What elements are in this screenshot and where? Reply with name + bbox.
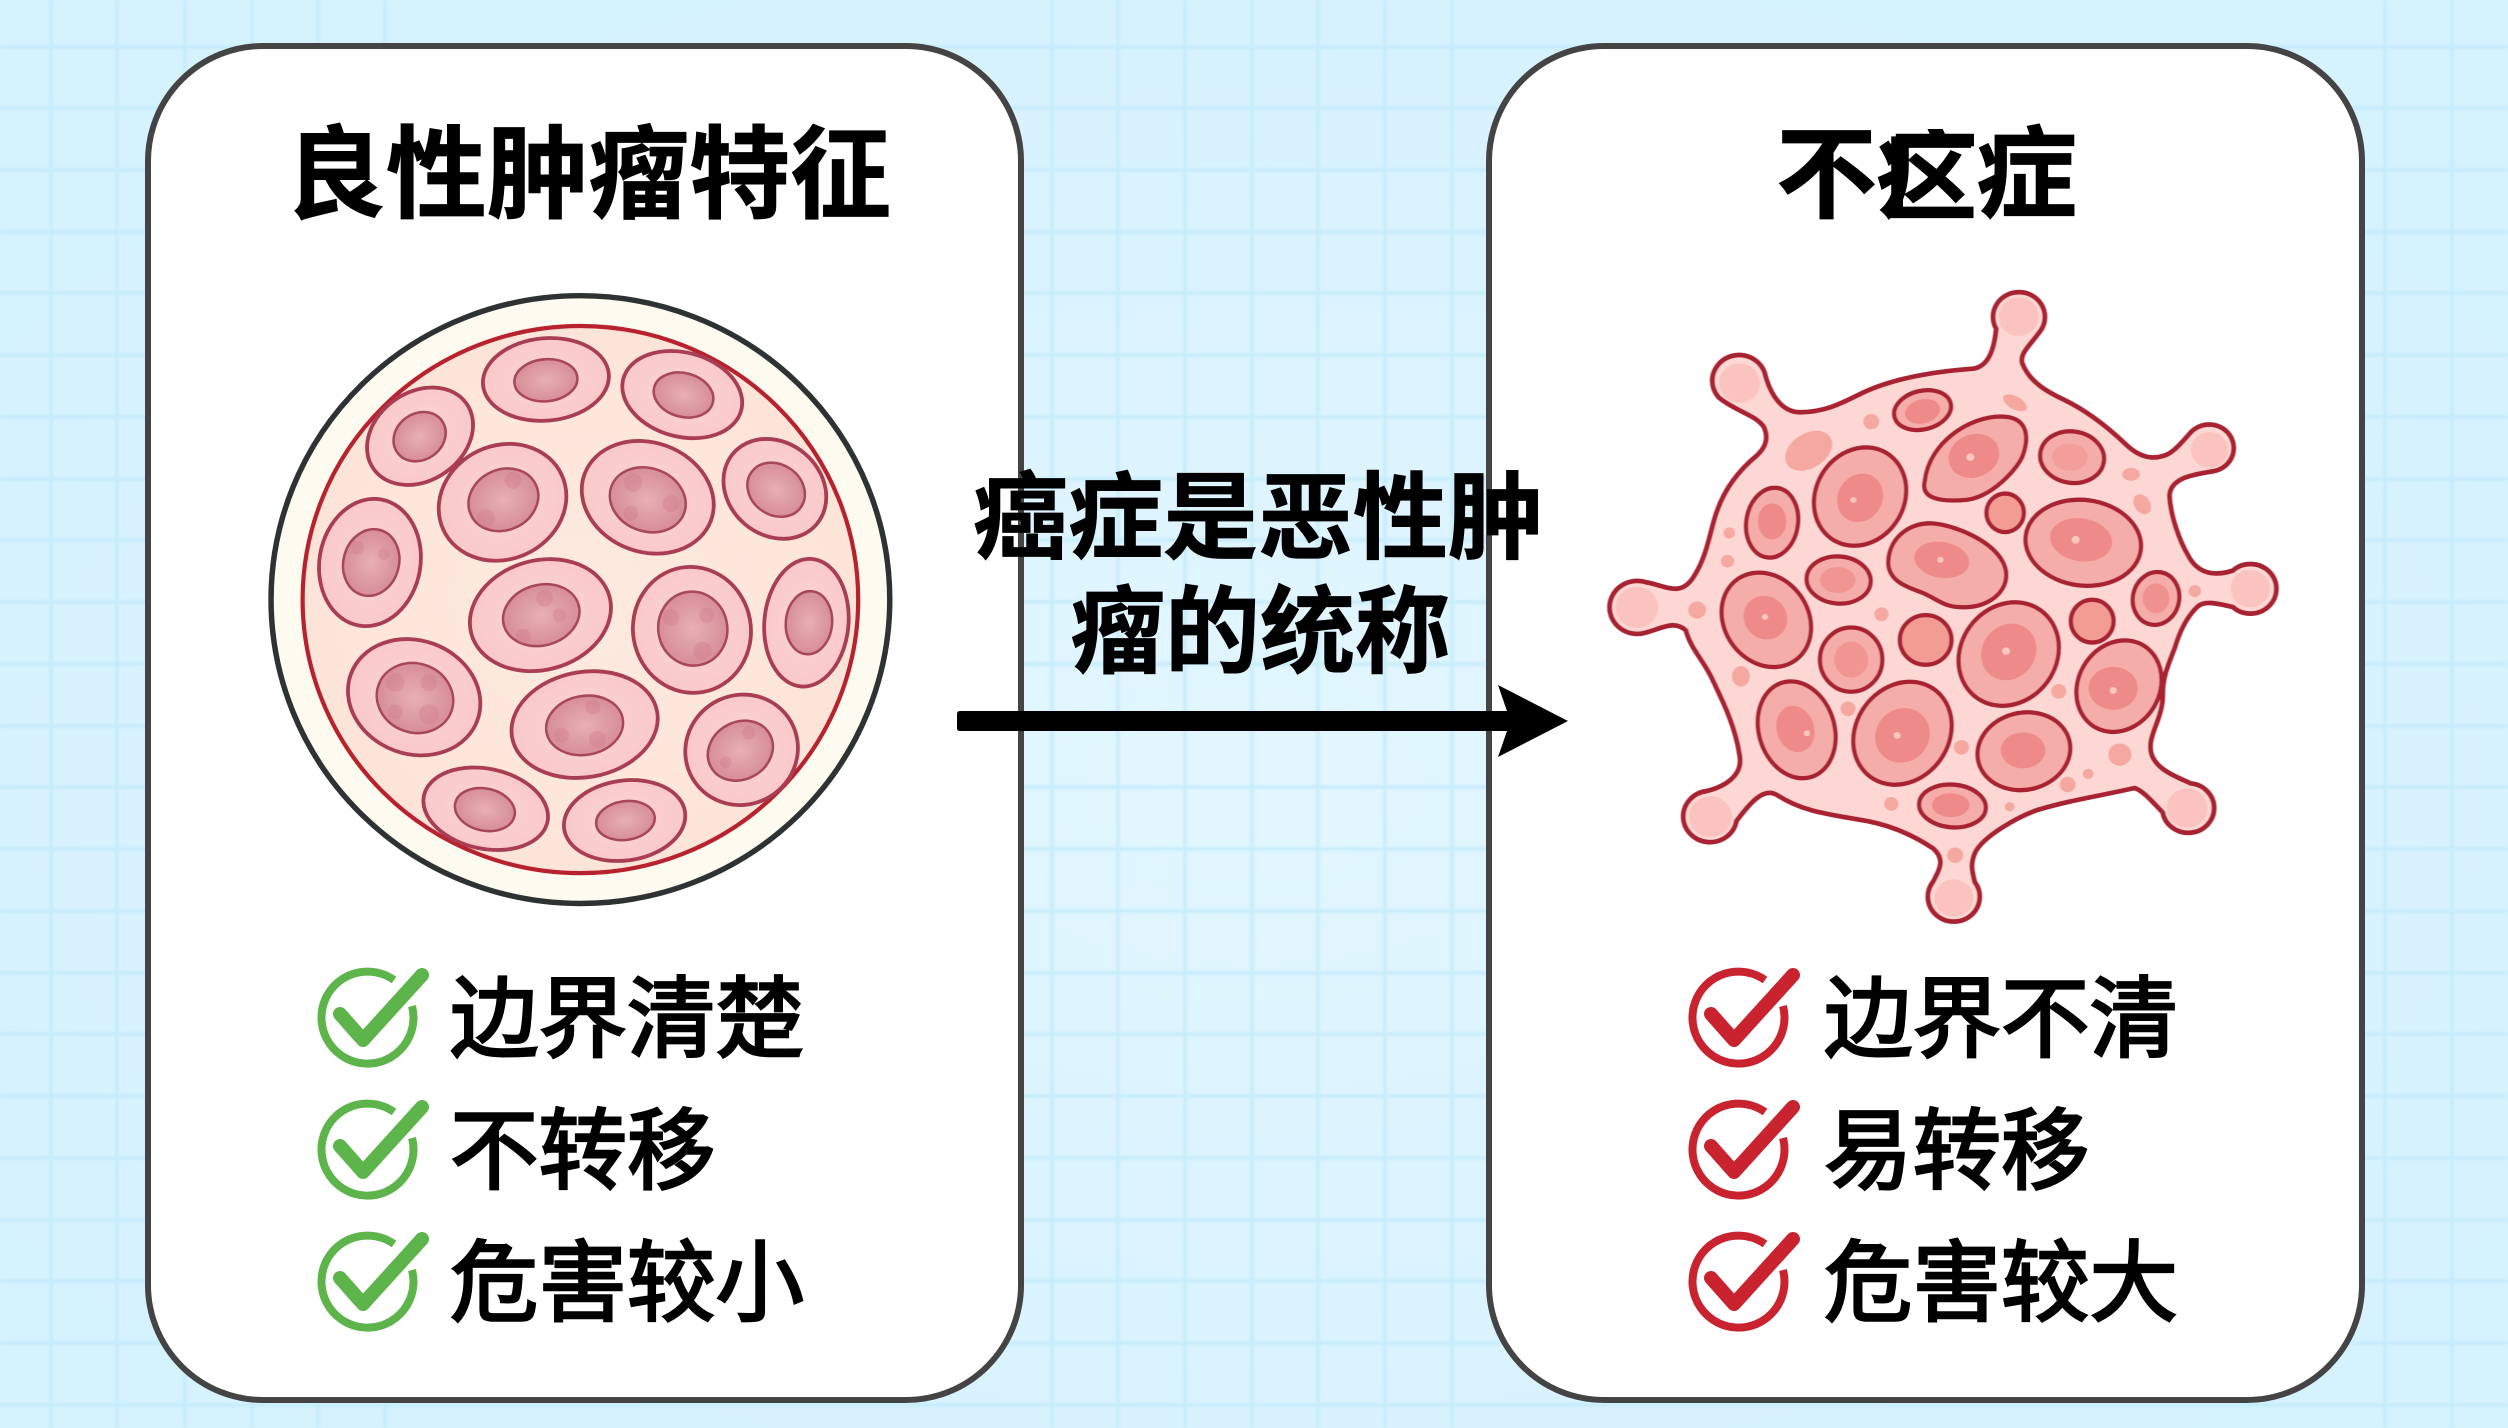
text: no metastasis: 不转移 (450, 1102, 716, 1201)
illustration: malignant tumor cell (1610, 292, 2276, 922)
icon: green check 3 (321, 1236, 422, 1328)
heading: cancer: 不 (1776, 120, 1877, 232)
illustration: benign tumor cell cluster (271, 296, 890, 903)
text: cancer is the general term for malignant tumors: 癌症是恶性肿 (973, 466, 1543, 572)
text: greater harm: 危害较大 (1824, 1234, 2178, 1333)
panel: benign tumor (148, 46, 1021, 1400)
icon: red check 2 (1692, 1104, 1793, 1196)
text: unclear boundaries: 边界不清 (1824, 970, 2178, 1069)
icon: red check 3 (1692, 1236, 1793, 1328)
text: clear boundaries: 边界清楚 (450, 970, 804, 1069)
icon: green check 2 (321, 1104, 422, 1196)
text: easily metastasizes: 易转移 (1824, 1102, 2090, 1201)
icon: green check 1 (321, 972, 422, 1064)
panel: cancer (1489, 46, 2362, 1400)
list: cancer traits (1692, 970, 2178, 1333)
heading: cancer: 区 (1884, 128, 1977, 232)
text: less harm: 危害较小 (450, 1234, 804, 1333)
list: benign tumor traits (321, 970, 804, 1333)
icon: red check 1 (1692, 972, 1793, 1064)
heading: cancer (1778, 123, 2074, 220)
arrow: benign to cancer (957, 685, 1568, 757)
heading: cancer: 疒 (1876, 120, 1977, 232)
text: cancer is the general term for malignant tumors (973, 466, 1543, 686)
heading: benign tumor features: 良性肿瘤特征 (285, 120, 891, 232)
heading: cancer: 症 (1976, 120, 2077, 232)
text: cancer is the general term for malignant tumors: 瘤的统称 (1070, 580, 1450, 686)
